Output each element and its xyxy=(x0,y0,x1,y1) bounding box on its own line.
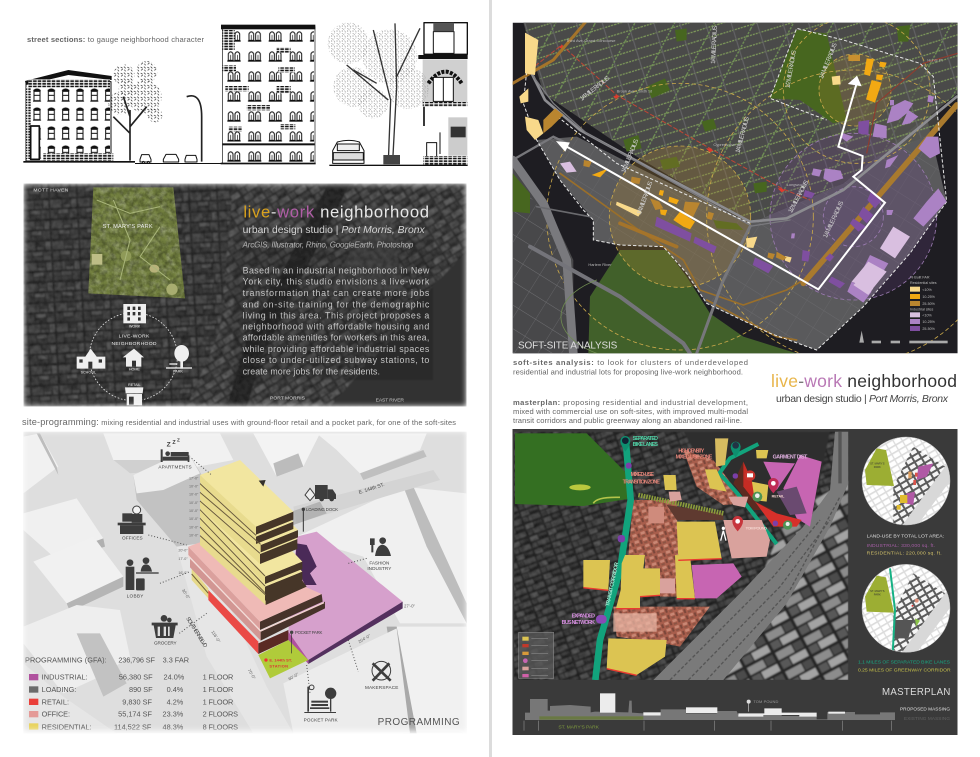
icon: offices xyxy=(118,506,146,541)
diagram: live-work cycle: NEIGHBORHOOD xyxy=(111,341,157,347)
rail and industrial blocks xyxy=(187,183,467,407)
text: project description: Based in an industrial neighborhood in New xyxy=(243,266,430,276)
park: st mary's aerial xyxy=(515,433,632,506)
height labels xyxy=(178,476,199,575)
legend row: retail: RETAIL: xyxy=(42,697,69,706)
text: transit totals: 1.1 MILES OF SEPARATED BIKE LANES xyxy=(858,659,951,665)
annotations: 27'-0" xyxy=(404,603,415,608)
text: land use totals: LAND-USE BY TOTAL LOT AREA: xyxy=(867,534,944,540)
icon: pocket park xyxy=(304,685,339,723)
label: soft-site analysis: SOFT-SITE ANALYSIS xyxy=(518,340,618,351)
building: rowhouse xyxy=(23,70,135,163)
height labels: 10'-0" xyxy=(189,517,199,521)
masterplan labels xyxy=(562,436,808,626)
text: project title: urban design studio | Port Morris, Bronx xyxy=(243,225,425,236)
icon: grocery xyxy=(152,615,178,645)
annotations: E. 144th ST. xyxy=(269,657,292,662)
massing legend: EXISTING MASSING xyxy=(904,716,950,721)
masterplan labels: RETAIL xyxy=(772,495,785,499)
lots: industrial xyxy=(655,120,882,288)
annotations: 60'-0" xyxy=(287,671,300,682)
legend row: industrial: INDUSTRIAL: xyxy=(42,673,88,682)
diagram: live-work cycle xyxy=(77,304,192,405)
page gutter xyxy=(489,0,492,757)
panel: project description map: MOTT HAVEN xyxy=(33,187,69,193)
legend row: residential: 8 FLOORS xyxy=(203,722,238,731)
building: residential tower floors xyxy=(200,460,307,605)
tom pound marker: TOM POUND xyxy=(753,699,778,704)
legend row: loading: 1 FLOOR xyxy=(203,685,233,694)
legend row: office: 2 FLOORS xyxy=(203,710,238,719)
greenway xyxy=(638,495,723,513)
icon: fashion industry: INDUSTRY xyxy=(367,566,391,571)
radius labels: 1/4 MILE RADIUS xyxy=(822,200,845,239)
heading: street sections: street sections: to gauge neighborhood character xyxy=(27,35,204,44)
icon: apartments: APARTMENTS xyxy=(158,465,192,470)
legend row: office: OFFICE: xyxy=(42,710,70,719)
map legend: <10% xyxy=(922,313,933,317)
text: transit totals xyxy=(858,659,951,673)
legend row: industrial: 56,380 SF xyxy=(119,673,153,682)
section: skyline massing xyxy=(524,693,950,731)
masterplan labels: TOM POUND xyxy=(746,525,767,530)
water: east river xyxy=(330,252,467,407)
building fragment xyxy=(418,23,468,165)
masterplan labels: TRANSIT CORRIDOR xyxy=(605,562,620,607)
text: project description: affordable amenities for workers in this area, xyxy=(243,333,429,343)
text: land use totals xyxy=(867,534,944,557)
map legend: Residential sites xyxy=(910,281,937,285)
tick marks xyxy=(524,721,892,731)
text: masterplan caption: masterplan: proposing residential and industrial development, xyxy=(513,398,748,407)
study area boundary xyxy=(523,28,947,350)
radius labels: 1/2 MILE RADIUS xyxy=(784,50,798,89)
table: programming GFA: 3.3 FAR xyxy=(163,656,189,665)
section: skyline massing: ST. MARY'S PARK xyxy=(558,725,600,731)
text: masterplan caption: mixed with commercial use on soft-sites, with improved multi-modal xyxy=(513,407,748,416)
panel: soft-site analysis map xyxy=(513,17,980,363)
station labels xyxy=(566,38,944,267)
land: north bronx xyxy=(523,23,958,223)
proposed massing xyxy=(600,693,845,717)
map legend: % Built FAR xyxy=(910,275,930,279)
icon: apartments xyxy=(158,437,192,470)
station labels: Brook Ave - Sixth St xyxy=(617,88,653,93)
legend row: retail xyxy=(29,697,233,706)
inset map: transit xyxy=(860,562,953,655)
context buildings xyxy=(23,433,467,733)
masses: retail edges xyxy=(583,559,722,675)
icon: retail: RETAIL xyxy=(128,383,141,387)
radius labels: 1/4 MILE RADIUS xyxy=(620,138,640,174)
radius labels: 1/4 MILE RADIUS xyxy=(710,25,719,64)
height labels: 17'-0" xyxy=(189,476,199,480)
inset map: land use xyxy=(860,435,953,528)
station labels: Cypress Ave xyxy=(713,142,736,147)
map legend: Industrial sites xyxy=(910,308,934,312)
table: programming GFA xyxy=(25,656,238,731)
title: live-work neighborhood: live-work neighborhood xyxy=(771,371,957,391)
legend row: retail: 9,830 SF xyxy=(122,697,153,706)
inset map: transit: PARK xyxy=(874,592,881,596)
dotted leaders xyxy=(148,458,367,693)
height labels: 10'-0" xyxy=(189,525,199,529)
label: masterplan: MASTERPLAN xyxy=(882,687,950,698)
icon: work building: WORK xyxy=(129,324,141,328)
masterplan labels: TRANSITION ZONE xyxy=(623,479,660,485)
legend row: industrial xyxy=(29,673,233,682)
masses: retail plaza xyxy=(755,502,802,527)
inset maps and masterplan notes xyxy=(858,435,953,698)
car: foreground xyxy=(333,140,364,163)
annotations xyxy=(181,482,415,682)
text: soft-sites analysis caption: residential and industrial lots for proposing live-work neighborhood. xyxy=(513,368,743,376)
station labels: Hunts Pt xyxy=(927,58,944,63)
panel: masterplan background xyxy=(512,429,958,735)
land: study area north-east xyxy=(797,28,940,163)
text: soft-sites analysis caption xyxy=(513,358,748,376)
building: industrial floor xyxy=(288,510,403,664)
text: project title xyxy=(242,203,429,250)
legend row: residential: 114,522 SF xyxy=(114,722,152,731)
annotations: 116'-0" xyxy=(210,630,222,644)
height labels: 10'-0" xyxy=(189,534,199,538)
icon: apartments: Z xyxy=(172,440,176,446)
icon: school: SCHOOL xyxy=(81,370,96,374)
annotations: STATION xyxy=(269,663,288,668)
icon: pocket park: POCKET PARK xyxy=(304,718,339,723)
height labels: 10'-0" xyxy=(189,501,199,505)
icon: fashion industry xyxy=(367,537,391,571)
street lamp xyxy=(187,96,202,162)
height labels: 20'-0" xyxy=(178,549,188,553)
map legend: 10-25% xyxy=(922,295,936,299)
text: project description: close to under-utilized subway stations, to xyxy=(243,355,429,365)
map legend: 10-25% xyxy=(922,320,936,324)
text: land use totals: RESIDENTIAL: 220,000 sq. ft. xyxy=(867,551,942,557)
text: project title: live-work neighborhood xyxy=(243,203,429,222)
text: project description xyxy=(242,266,430,377)
rail corridors xyxy=(513,23,957,361)
park strip xyxy=(539,716,643,720)
subway line xyxy=(530,45,958,200)
height labels: 10'-0" xyxy=(189,509,199,513)
annotations: E. 144th ST. xyxy=(358,482,385,496)
legend row: retail: 4.2% xyxy=(167,697,184,706)
park: pocket park green xyxy=(258,640,308,678)
masterplan labels: GARMENT DIST. xyxy=(773,454,808,460)
highway xyxy=(653,432,848,680)
building: tenement xyxy=(221,25,316,164)
masterplan labels: SEPARATED xyxy=(633,436,658,442)
panel: project description map xyxy=(19,179,471,411)
legend row: industrial: 24.0% xyxy=(164,673,185,682)
legend row: retail: 1 FLOOR xyxy=(203,697,233,706)
legend row: loading xyxy=(29,685,233,694)
table: programming GFA: 236,796 SF xyxy=(118,656,156,665)
icon: offices: OFFICES xyxy=(122,536,143,541)
diagram: live-work cycle: LIVE-WORK xyxy=(119,334,150,340)
building: office floors xyxy=(188,542,325,641)
existing massing xyxy=(525,699,895,720)
masses: industrial xyxy=(692,455,822,598)
route arrow xyxy=(558,77,885,289)
masterplan labels: BUS NETWORK xyxy=(562,620,595,626)
tom pound marker xyxy=(747,699,778,712)
text: project description: and on-site training for the demographic xyxy=(243,300,430,310)
title: live-work neighborhood xyxy=(771,371,957,405)
masterplan aerial xyxy=(514,432,848,680)
icon: park tree: PARK xyxy=(173,370,183,374)
land: west shore xyxy=(513,160,573,353)
masterplan labels: BIKE LANES xyxy=(633,442,658,448)
text: masterplan caption xyxy=(513,398,748,425)
text: project description: York city, this studio envisions a live-work xyxy=(243,277,430,287)
masses: office xyxy=(648,492,770,593)
icon: lobby xyxy=(126,557,159,599)
tinted walking radii xyxy=(547,17,980,363)
radius labels: 1/2 MILE RADIUS xyxy=(787,179,810,214)
height labels: 17'-0" xyxy=(178,557,188,561)
height labels: 10'-0" xyxy=(189,492,199,496)
annotations: SOUTHERN BLVD xyxy=(184,616,208,649)
radius labels: 1/4 MILE RADIUS xyxy=(636,180,655,216)
massing legend: PROPOSED MASSING xyxy=(900,707,950,712)
radius labels: 1/4 MILE RADIUS xyxy=(818,42,839,80)
icon: makerspace xyxy=(365,661,398,690)
radius labels xyxy=(579,25,845,239)
legend row: industrial: 1 FLOOR xyxy=(203,673,233,682)
height labels: 16'-0" xyxy=(178,571,188,575)
massing legend xyxy=(900,707,950,721)
icon: apartments: Z xyxy=(167,442,171,449)
icon: loading truck xyxy=(302,485,338,512)
annotations: POCKET PARK xyxy=(295,630,322,635)
legend row: loading: 890 SF xyxy=(129,685,153,694)
text: project description: transformation that can create more jobs xyxy=(243,288,430,298)
legend row: office: 23.3% xyxy=(163,710,184,719)
cars xyxy=(140,154,197,163)
text: project title: ArcGIS, Illustrator, Rhino, GoogleEarth, Photoshop xyxy=(242,241,414,250)
station labels: Longwood xyxy=(787,182,805,187)
text: transit totals: 0.25 MILES OF GREENWAY CORRIDOR xyxy=(858,667,951,673)
park: green parcels xyxy=(513,25,910,230)
north arrow and scale bar xyxy=(859,331,948,343)
legend row: loading: 0.4% xyxy=(167,685,184,694)
panel: project description map: PORT MORRIS xyxy=(270,395,306,401)
annotations: 204'-0" xyxy=(357,633,372,644)
title: live-work neighborhood: urban design studio | Port Morris, Bronx xyxy=(776,393,949,405)
lots: residential xyxy=(519,33,860,263)
inset map: land use: PARK xyxy=(874,465,881,469)
annotations: 30'-0" xyxy=(181,588,191,600)
masterplan labels: HIGH-DENSITY xyxy=(678,449,705,455)
label: programming: PROGRAMMING xyxy=(378,717,460,728)
icon: home: HOME xyxy=(129,368,140,372)
icon: loading truck: LOADING DOCK xyxy=(306,507,338,512)
inset map: transit: ST. MARY'S xyxy=(870,589,885,593)
icon: apartments: Z xyxy=(177,437,180,442)
masses: residential xyxy=(583,438,768,675)
land: randalls island green xyxy=(588,250,797,353)
panel: project description map: ST. MARY'S PARK xyxy=(103,224,153,230)
legend row: loading: LOADING: xyxy=(42,685,76,694)
radius labels: 1/4 MILE RADIUS xyxy=(579,75,611,103)
legend row: residential: RESIDENTIAL: xyxy=(42,722,92,731)
text: project description: neighborhood with affordable housing and xyxy=(243,322,429,332)
masterplan labels: MIXED-USE xyxy=(631,472,654,478)
legend row: office xyxy=(29,710,238,719)
legend row: office: 55,174 SF xyxy=(118,710,153,719)
tree: street tree xyxy=(108,61,162,161)
text: project description: create more jobs for the residents. xyxy=(243,367,380,377)
heading: site programming: site-programming: mixing residential and industrial uses with ground-floor retail and a pocket park, for one of the soft-sites xyxy=(22,417,456,427)
text: land use totals: INDUSTRIAL: 330,000 sq. ft. xyxy=(867,543,935,549)
map legend: 25-50% xyxy=(922,302,936,306)
icon: makerspace: MAKERSPACE xyxy=(365,685,398,690)
transit corridor xyxy=(595,443,777,680)
icon: fashion industry: FASHION xyxy=(369,560,389,565)
legend row: residential: 48.3% xyxy=(163,722,184,731)
map legend: 25-50% xyxy=(922,327,936,331)
masterplan labels: MIXED-USE ZONE xyxy=(676,455,713,461)
masterplan labels: EXPANDED xyxy=(572,613,595,619)
map pins xyxy=(596,436,792,624)
text: project description: living in this area. This project proposes a xyxy=(243,311,429,321)
radius labels: 1/4 MILE RADIUS xyxy=(735,116,751,154)
text: soft-sites analysis caption: soft-sites analysis: to look for clusters of underdeveloped xyxy=(513,358,748,367)
text: project description: while providing affordable industrial spaces xyxy=(242,344,430,354)
street section drawing xyxy=(23,23,468,166)
map legend xyxy=(910,275,937,331)
tree: large street tree xyxy=(328,23,429,162)
height labels: 10'-0" xyxy=(189,484,199,488)
icon: lobby: LOBBY xyxy=(127,594,143,599)
map legend: <10% xyxy=(922,288,933,292)
panel: project description map: EAST RIVER xyxy=(376,398,404,404)
table: programming GFA: PROGRAMMING (GFA): xyxy=(25,656,107,665)
inset map: land use: ST. MARY'S xyxy=(870,462,885,466)
salmon district blocks xyxy=(613,450,773,647)
building: lower residential and retail xyxy=(192,568,288,654)
station labels: Third Ave-Grand Concourse xyxy=(566,38,616,43)
legend row: residential xyxy=(29,722,238,731)
land: study area south xyxy=(537,117,947,350)
panel: programming axonometric xyxy=(18,426,472,736)
station labels: Harlem River xyxy=(588,262,612,267)
masterplan legend xyxy=(519,632,554,678)
icon: grocery: GROCERY xyxy=(154,640,177,645)
text: masterplan caption: transit corridors and public greenway along an abandoned rail-line. xyxy=(513,416,742,425)
annotations: 70'-0" xyxy=(247,668,257,680)
park: st mary's xyxy=(87,187,187,300)
